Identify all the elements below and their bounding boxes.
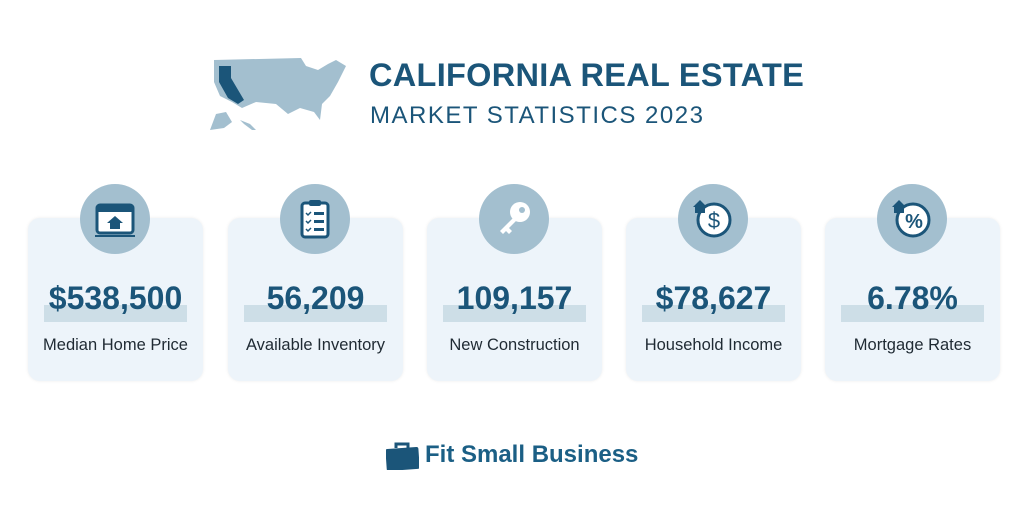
icon: calendar home xyxy=(80,184,150,254)
subtitle: MARKET STATISTICS 2023 xyxy=(370,102,704,129)
icon: US map xyxy=(210,58,346,130)
label: Median Home Price xyxy=(43,336,188,354)
value: $538,500 xyxy=(49,280,182,316)
value: 6.78% xyxy=(867,280,958,316)
panel: median home price xyxy=(28,218,203,381)
icon: clipboard xyxy=(280,184,350,254)
label: Household Income xyxy=(645,336,782,354)
value: $78,627 xyxy=(656,280,771,316)
label: Mortgage Rates xyxy=(854,336,971,354)
icon: percent home xyxy=(877,184,947,254)
value: 56,209 xyxy=(267,280,364,316)
label: Available Inventory xyxy=(246,336,385,354)
icon: dollar cycle: $ xyxy=(708,208,720,233)
icon: key xyxy=(479,184,549,254)
panel: household income xyxy=(626,218,801,381)
icon: briefcase xyxy=(386,442,419,470)
logo: Fit Small Business: Fit Small Business xyxy=(425,441,638,468)
label: New Construction xyxy=(449,336,580,354)
panel: available inventory xyxy=(228,218,403,381)
title: CALIFORNIA REAL ESTATE xyxy=(369,57,804,93)
value: 109,157 xyxy=(457,280,572,316)
icon: percent home: % xyxy=(905,211,923,233)
panel: new construction xyxy=(427,218,602,381)
panel: mortgage rates xyxy=(825,218,1000,381)
icon: dollar cycle xyxy=(678,184,748,254)
